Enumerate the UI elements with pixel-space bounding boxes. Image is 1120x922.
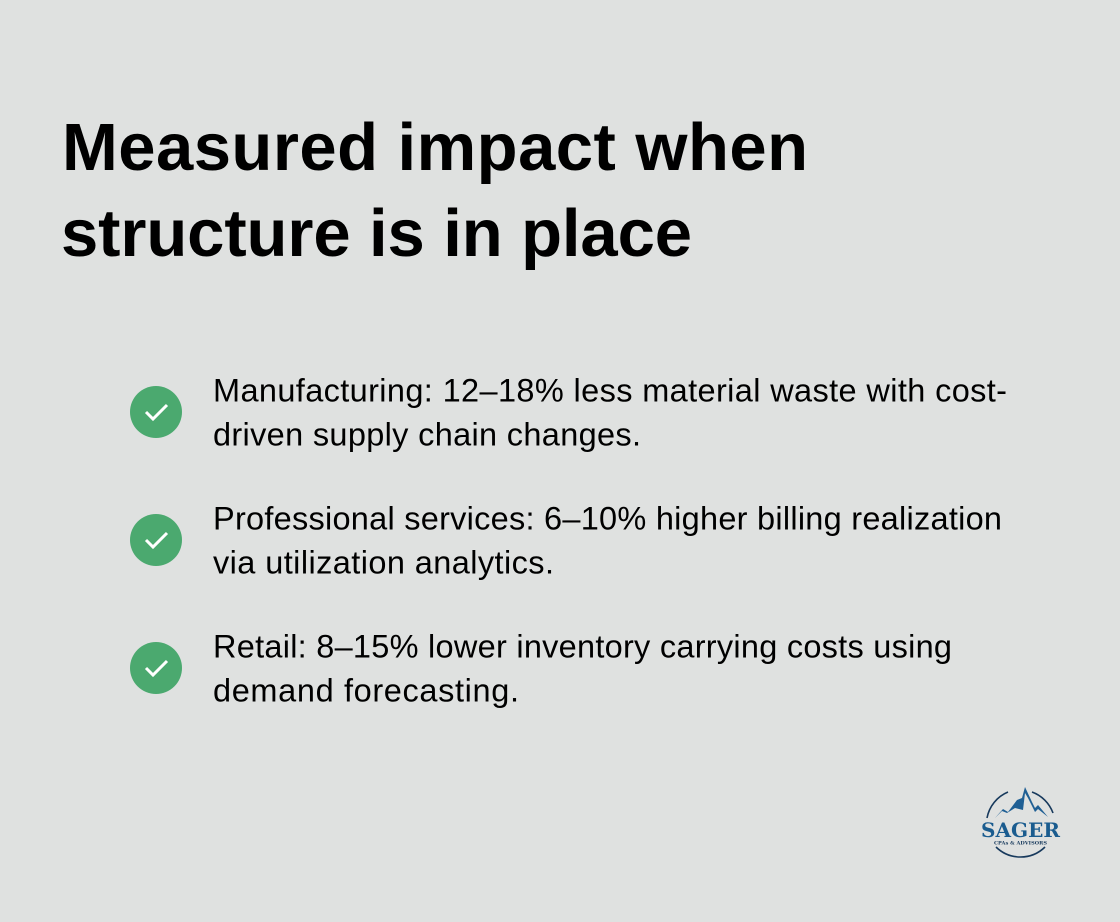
text: manufacturing bbox=[213, 372, 1007, 452]
logo wordmark: SAGER bbox=[981, 818, 1060, 842]
text: retail: Retail: 8–15% lower inventory carrying costs using bbox=[213, 628, 952, 664]
item: manufacturing bbox=[130, 372, 1007, 452]
text: retail: demand forecasting. bbox=[213, 672, 519, 708]
text: professional services bbox=[213, 500, 1002, 580]
title bbox=[61, 110, 808, 271]
text: professional services: Professional services: 6–10% higher billing realization bbox=[213, 500, 1002, 536]
logo tagline: CPAs & ADVISORS bbox=[994, 840, 1047, 846]
item: professional services bbox=[130, 500, 1002, 580]
item: retail bbox=[130, 628, 952, 708]
icon: check retail bbox=[130, 642, 182, 694]
logo: Sager CPAs & Advisors bbox=[981, 787, 1060, 857]
logo mountains bbox=[995, 787, 1048, 818]
title: structure is in place bbox=[61, 196, 692, 271]
text: manufacturing: Manufacturing: 12–18% less material waste with cost- bbox=[213, 372, 1007, 408]
text: manufacturing: driven supply chain changes. bbox=[213, 416, 641, 452]
icon: check manufacturing bbox=[130, 386, 182, 438]
logo ring bbox=[987, 792, 1053, 857]
title: Measured impact when bbox=[62, 110, 808, 185]
text: professional services: via utilization analytics. bbox=[213, 544, 554, 580]
text: retail bbox=[213, 628, 952, 708]
checklist bbox=[130, 372, 1007, 708]
icon: check professional services bbox=[130, 514, 182, 566]
